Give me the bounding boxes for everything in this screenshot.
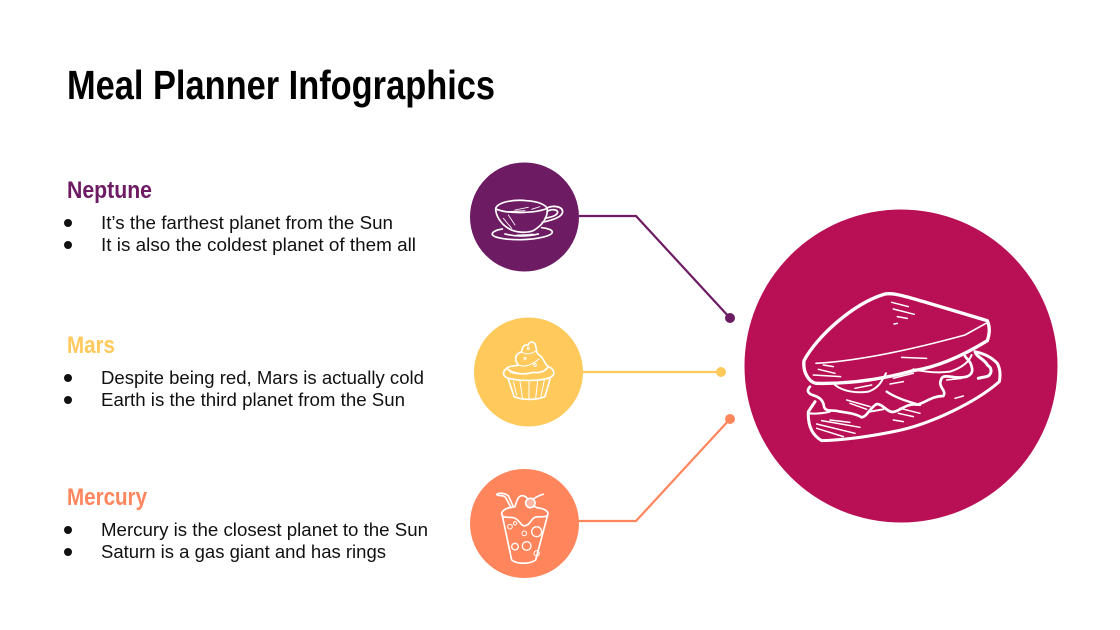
shading: [813, 302, 963, 437]
circle icon: coffee cup: [470, 162, 579, 272]
arrow: Mercury connector: [579, 414, 735, 521]
circle icon: sandwich: [744, 210, 1058, 522]
bullet list: Mercury: Saturn is a gas giant and has rings: [101, 542, 386, 562]
bullet list: Mercury: Mercury is the closest planet to the Sun: [101, 520, 428, 540]
bottom bread: [808, 352, 1000, 441]
heading: Neptune: Neptune: [67, 177, 152, 204]
bullet list: Mercury: [64, 520, 428, 562]
bullet list: Mars: Earth is the third planet from the Sun: [101, 390, 405, 410]
circle icon: milkshake: [470, 469, 579, 578]
heading: Mercury: Mercury: [67, 484, 148, 511]
bullet list: Mars: Despite being red, Mars is actually cold: [101, 368, 424, 388]
text block: Neptune: [64, 177, 416, 255]
text block: Mercury: [64, 484, 428, 562]
heading: Mars: Mars: [67, 332, 115, 359]
arrow: Mars connector: [583, 367, 726, 377]
text block: Mars: [64, 332, 424, 410]
top bread: [804, 294, 989, 383]
arrow: Neptune connector: [579, 216, 735, 323]
title: Meal Planner Infographics: [67, 62, 495, 108]
lettuce and filling: [808, 356, 972, 417]
bullet list: Mars: [64, 368, 424, 410]
bullet list: Neptune: It’s the farthest planet from the Sun: [101, 213, 393, 233]
bullet list: Neptune: [64, 213, 416, 255]
bullet list: Neptune: It is also the coldest planet of them all: [101, 235, 416, 255]
circle icon: cupcake: [474, 318, 583, 426]
